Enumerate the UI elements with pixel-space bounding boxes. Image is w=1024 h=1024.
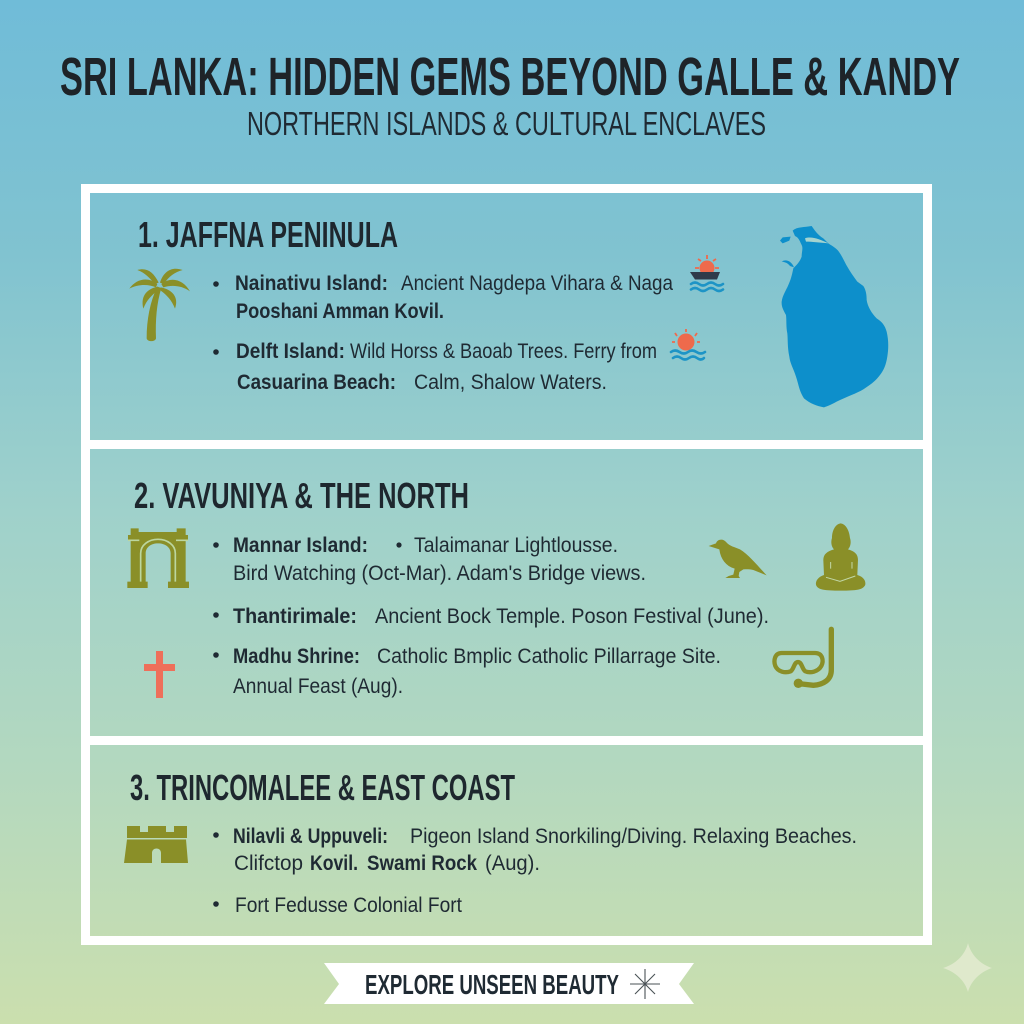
text: Delft Island: Delft Island:: [236, 340, 345, 363]
icon: fort: [124, 826, 188, 863]
panel: Jaffna Peninsula: [129, 214, 888, 407]
text: Nilavli and Uppuveli: Kovil.: [310, 852, 358, 875]
text: Mannar Island: Talaimanar Lightlousse.: [414, 534, 618, 557]
icon: compass star: [630, 969, 660, 999]
text: Madhu Shrine: Madhu Shrine:: [233, 645, 360, 668]
text: Nilavli and Uppuveli: Nilavli & Uppuveli:: [233, 825, 388, 848]
icon: boat and sun: [690, 255, 723, 291]
bullet: [213, 652, 219, 658]
icon: cross: [144, 651, 175, 698]
text: Mannar Island: Bird Watching (Oct-Mar). Adam's Bridge views.: [233, 562, 646, 585]
heading: Vavuniya: 2. VAVUNIYA & THE NORTH: [134, 475, 469, 516]
text: Mannar Island: Mannar Island:: [233, 534, 368, 557]
subtitle: NORTHERN ISLANDS & CULTURAL ENCLAVES: [247, 105, 766, 142]
icon: sun over waves: [671, 329, 705, 360]
text: Thantirimale: Thantirimale:: [233, 605, 357, 628]
text: Delft Island: Casuarina Beach:: [237, 371, 396, 394]
bullet: [213, 612, 219, 618]
bullet: [213, 901, 219, 907]
text: Mannar Island: [233, 534, 646, 585]
icon: stone arch: [127, 528, 189, 588]
bullet: [213, 281, 219, 287]
text: Fort Fedusse: Fort Fedusse Colonial Fort: [235, 894, 462, 917]
text: Delft Island: Wild Horss & Baoab Trees. Ferry from: [350, 340, 657, 363]
bullet: [213, 542, 219, 548]
map: Sri Lanka: [780, 226, 888, 407]
icon: seated Buddha: [816, 523, 865, 591]
icon: bird: [709, 540, 767, 578]
heading: Trincomalee: 3. TRINCOMALEE & EAST COAST: [130, 767, 515, 808]
text: Nilavli and Uppuveli: [233, 825, 857, 875]
text: Madhu Shrine: Catholic Bmplic Catholic Pillarrage Site.: [377, 645, 721, 668]
text: Nainativu Island: [235, 272, 673, 323]
text: Nilavli and Uppuveli: Pigeon Island Snorkiling/Diving. Relaxing Beaches.: [410, 825, 857, 848]
banner: [324, 963, 694, 1004]
lagoon slit: [805, 238, 828, 243]
panel: Vavuniya and the North: [127, 475, 865, 698]
text: Nainativu Island: Ancient Nagdepa Vihara & Naga: [401, 272, 673, 295]
text: Madhu Shrine: [233, 645, 721, 698]
bullet: [213, 349, 219, 355]
text: Nainativu Island: Nainativu Island:: [235, 272, 388, 295]
banner text: EXPLORE UNSEEN BEAUTY: [365, 969, 619, 1000]
text: Madhu Shrine: Annual Feast (Aug).: [233, 675, 403, 698]
white frame: [81, 184, 932, 945]
heading: Jaffna: 1. JAFFNA PENINULA: [138, 214, 398, 255]
panel: Trincomalee and East Coast: [124, 767, 857, 917]
text: Nilavli and Uppuveli: (Aug).: [485, 852, 540, 875]
text: Delft Island: Calm, Shalow Waters.: [414, 371, 607, 394]
text: Nainativu Island: Pooshani Amman Kovil.: [236, 300, 444, 323]
text: Nilavli and Uppuveli: Clifctop: [234, 852, 303, 875]
icon: snorkel mask: [774, 629, 831, 688]
bullet: [213, 832, 219, 838]
decorative sparkle: [943, 943, 992, 992]
icon: palm tree: [129, 269, 190, 341]
text: Delft Island: [236, 340, 657, 394]
text: Thantirimale: Ancient Bock Temple. Poson Festival (June).: [375, 605, 769, 628]
text: Nilavli and Uppuveli: Swami Rock: [367, 852, 477, 875]
